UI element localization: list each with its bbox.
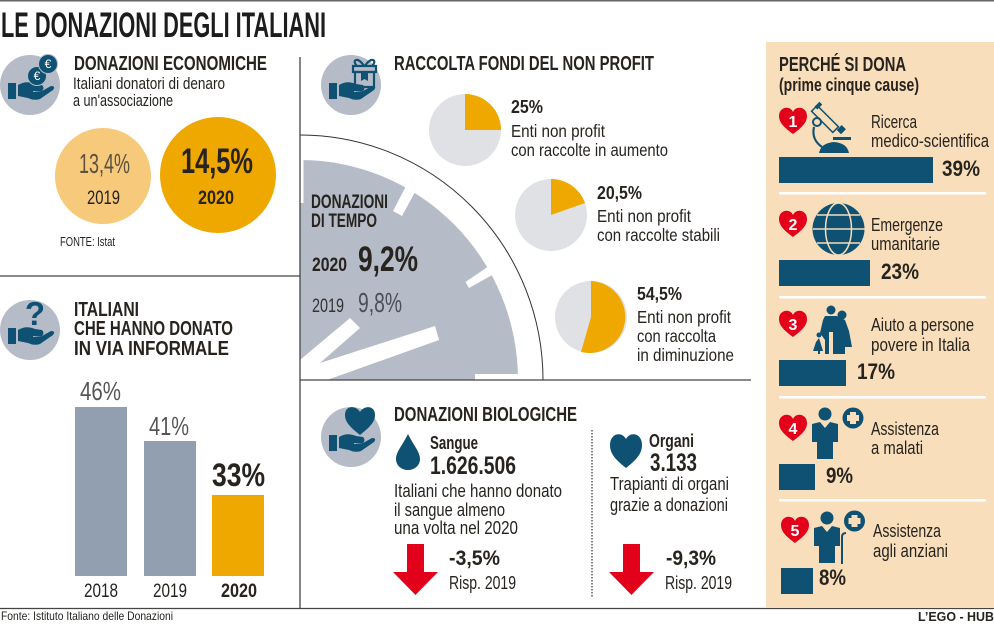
circle 2019: 2019 [87, 188, 120, 209]
label: agli anziani [873, 541, 948, 561]
bar [781, 568, 813, 594]
organi change: -9,3% [666, 547, 716, 570]
pie 20,5% [515, 179, 720, 251]
organi change [665, 547, 732, 593]
bar chart: 33% [212, 457, 265, 493]
organi text: grazie a donazioni [610, 495, 728, 515]
cause 3 [779, 306, 974, 386]
pie 54,5% [555, 281, 734, 365]
pie 54,5%: con raccolta [637, 326, 716, 346]
heading: CHE HANNO DONATO [74, 318, 233, 340]
subtitle: a un'associazione [73, 91, 173, 110]
footer source: Fonte: Istituto Italiano delle Donazioni [1, 609, 173, 623]
cause 1: 1 [789, 114, 798, 131]
organi text: Trapianti di organi [610, 474, 729, 494]
footer credit: L’EGO - HUB [918, 610, 994, 624]
sangue change [449, 547, 516, 593]
panel: donazioni economiche [55, 53, 276, 249]
icon: microscope [812, 102, 851, 153]
pie 20,5%: 20,5% [597, 183, 642, 203]
title: LE DONAZIONI DEGLI ITALIANI [1, 6, 326, 45]
bar chart [75, 376, 265, 602]
heading: RACCOLTA FONDI DEL NON PROFIT [394, 53, 654, 75]
pie 54,5%: 54,5% [637, 284, 682, 304]
icon: elderly person with cross [814, 510, 865, 564]
sangue text [394, 433, 562, 538]
clock heading [311, 192, 388, 232]
label [871, 315, 974, 355]
circle 2020: 2020 [198, 188, 234, 209]
organi text: 3.133 [650, 449, 697, 477]
label [873, 521, 948, 561]
cause 5 [781, 510, 948, 594]
pie 25%: Enti non profit [511, 121, 605, 141]
pie 25% [429, 94, 668, 166]
icon: hand with coins [0, 54, 60, 115]
bar [779, 260, 870, 286]
label: Aiuto a persone [871, 315, 974, 335]
bar chart: 46% [80, 376, 121, 406]
heading [74, 299, 233, 360]
bar chart: 2020 [221, 581, 257, 602]
icon: person with cross [812, 408, 864, 459]
sangue text: una volta nel 2020 [394, 518, 518, 538]
pie 25%: con raccolte in aumento [511, 140, 668, 160]
2019 value [312, 287, 402, 318]
clock heading: DI TEMPO [311, 211, 377, 232]
heading: ITALIANI [74, 299, 139, 321]
arrow: organi down [609, 544, 654, 595]
organi change: Risp. 2019 [665, 573, 732, 593]
cause 2: 2 [789, 217, 798, 234]
sangue text: il sangue almeno [394, 500, 505, 520]
icon: hand with heart [321, 407, 381, 467]
pie 20,5%: Enti non profit [597, 206, 691, 226]
label [871, 419, 940, 458]
subtitle: Italiani donatori di denaro [73, 74, 225, 93]
sangue text: 1.626.506 [430, 452, 516, 480]
2019 value: 2019 [312, 296, 344, 317]
pie 20,5%: con raccolte stabili [597, 225, 720, 245]
2020 value: 9,2% [358, 240, 418, 279]
panel: donazioni biologiche [393, 404, 732, 598]
clock heading: DONAZIONI [311, 192, 388, 213]
label: Assistenza [871, 419, 940, 439]
cause 4: 4 [789, 421, 798, 438]
heading [779, 53, 919, 95]
panel: donazioni informali [74, 299, 265, 602]
cause 5: 5 [791, 523, 800, 540]
bar [779, 157, 933, 183]
sangue change: -3,5% [449, 547, 500, 570]
panel: perché si dona [766, 42, 994, 608]
panel: raccolta fondi [394, 53, 734, 365]
circle 2020: 14,5% [181, 142, 253, 181]
panel: donazioni di tempo clock [299, 135, 543, 380]
pie 25%: 25% [511, 97, 543, 117]
heading: DONAZIONI ECONOMICHE [74, 53, 267, 75]
icon: organ heart [610, 434, 642, 468]
icon: family [813, 306, 852, 354]
icon: hand with coins: € [34, 69, 41, 83]
heading: PERCHÉ SI DONA [779, 53, 906, 76]
heading: IN VIA INFORMALE [74, 338, 229, 360]
icon: hand with question mark [0, 295, 60, 360]
circle 2020 [160, 117, 276, 233]
icon: hand with coins: € [45, 57, 52, 71]
sangue change: Risp. 2019 [449, 573, 516, 593]
label: umanitarie [871, 234, 940, 254]
label [871, 215, 943, 254]
source: FONTE: Istat [60, 235, 115, 249]
pie 54,5%: in diminuzione [637, 345, 734, 365]
organi text [610, 431, 729, 515]
cause 2 [779, 203, 943, 286]
value: 39% [942, 156, 980, 181]
label: Emergenze [871, 215, 943, 235]
cause 3: 3 [789, 317, 798, 334]
sangue text: Italiani che hanno donato [394, 481, 562, 501]
cause 4 [779, 408, 940, 490]
organi text: Organi [649, 431, 694, 451]
value: 23% [881, 259, 919, 284]
circle 2019: 13,4% [79, 148, 130, 179]
value: 9% [826, 463, 853, 488]
value: 8% [819, 565, 846, 590]
label: povere in Italia [871, 335, 971, 355]
icon: hand with question mark: ? [25, 295, 45, 332]
2020 value [312, 240, 418, 279]
arrow: sangue down [393, 544, 438, 595]
label: Ricerca [871, 112, 918, 132]
heading: DONAZIONI BIOLOGICHE [394, 404, 577, 426]
bar [779, 360, 846, 386]
label: a malati [871, 438, 923, 458]
value: 17% [857, 359, 895, 384]
heading: (prime cinque cause) [779, 75, 919, 95]
2020 value: 2020 [312, 255, 347, 276]
2019 value: 9,8% [358, 287, 402, 318]
icon: globe [812, 203, 865, 255]
label [871, 112, 990, 151]
bar chart: 41% [149, 411, 189, 441]
pie 54,5%: Enti non profit [637, 307, 731, 327]
bar chart: 2019 [153, 581, 187, 602]
bar chart: 2018 [84, 581, 118, 602]
circle 2019 [55, 128, 151, 224]
cause 1 [779, 102, 990, 183]
sangue text: Sangue [430, 433, 478, 453]
icon: hand with gift [321, 55, 381, 115]
bar [779, 464, 815, 490]
subtitle [73, 74, 225, 110]
icon: blood drop [396, 434, 420, 470]
label: Assistenza [873, 521, 942, 541]
